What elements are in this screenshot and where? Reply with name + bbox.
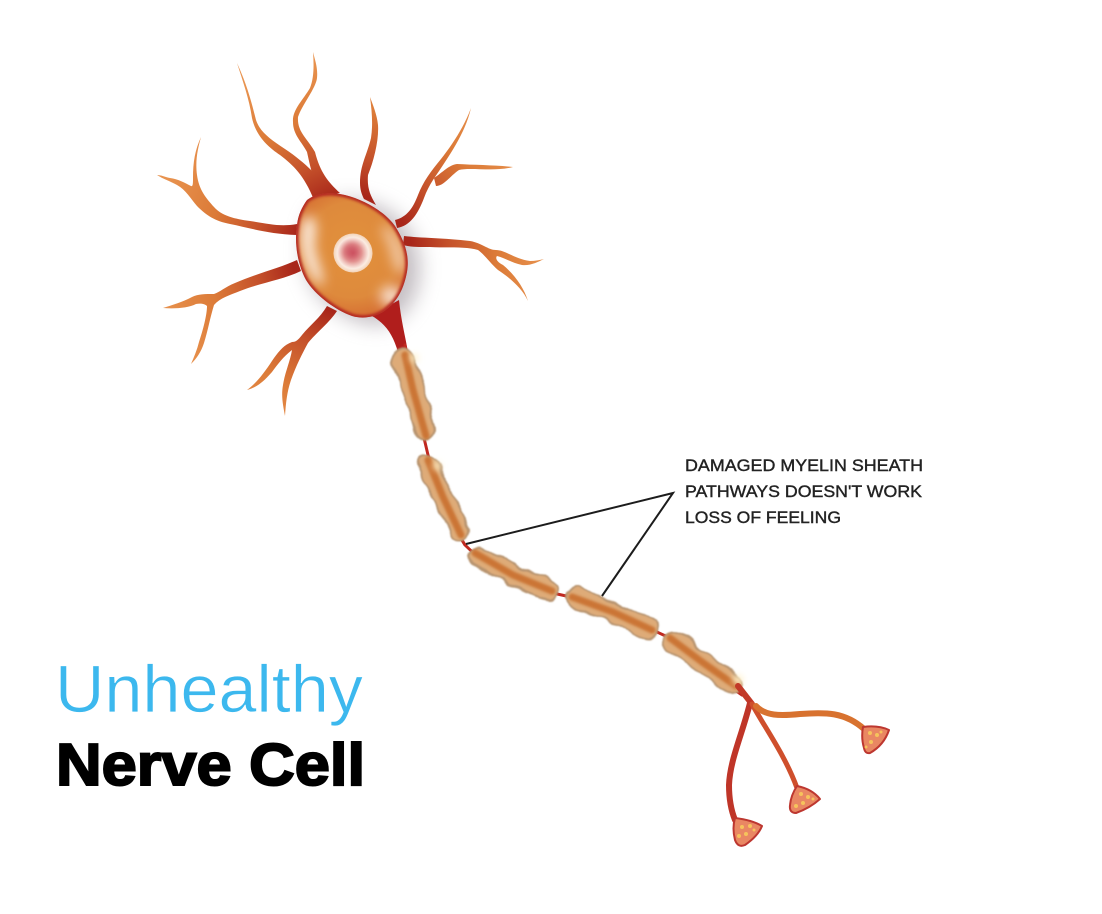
dendrite: left lower with fork [163,260,301,364]
dendrites [157,52,544,416]
bright node glints [410,354,743,685]
nucleus [334,234,372,272]
dendrite: centre top [360,97,378,205]
dendrite: right with fork [403,236,544,301]
terminal vesicles [737,730,882,838]
axon hillock [372,300,408,352]
dendrite: lower with fork [247,306,337,416]
neuron illustration [157,52,889,846]
terminal branches [729,686,864,820]
callout text: DAMAGED MYELIN SHEATH [685,456,923,475]
dendrite: top [293,52,340,196]
title [55,652,365,798]
cell body shadow [305,200,420,325]
cell body [296,193,408,318]
dendrite: upper right branch [434,164,513,186]
terminal bulbs [734,726,889,846]
title line: Nerve Cell: Nerve Cell [56,732,365,798]
dendrite: left upper with fork [157,137,297,235]
nucleolus [343,243,359,259]
axon core line [405,345,742,695]
title line: Unhealthy: Unhealthy [55,652,364,727]
callout text [685,456,923,527]
sheath outer edge [404,360,732,683]
body fill [296,193,408,318]
callout text: PATHWAYS DOESN'T WORK [685,482,923,501]
callout pointer lines [466,493,673,596]
axon terminals [729,686,889,846]
dendrite: upper right [395,108,471,228]
myelin sheath segments [404,345,743,695]
sheath fill [404,360,732,683]
body rim [296,193,408,318]
dendrite: upper left long [237,63,332,200]
body highlights [301,217,406,306]
callout text: LOSS OF FEELING [685,508,841,527]
sheath inner core [405,355,736,686]
